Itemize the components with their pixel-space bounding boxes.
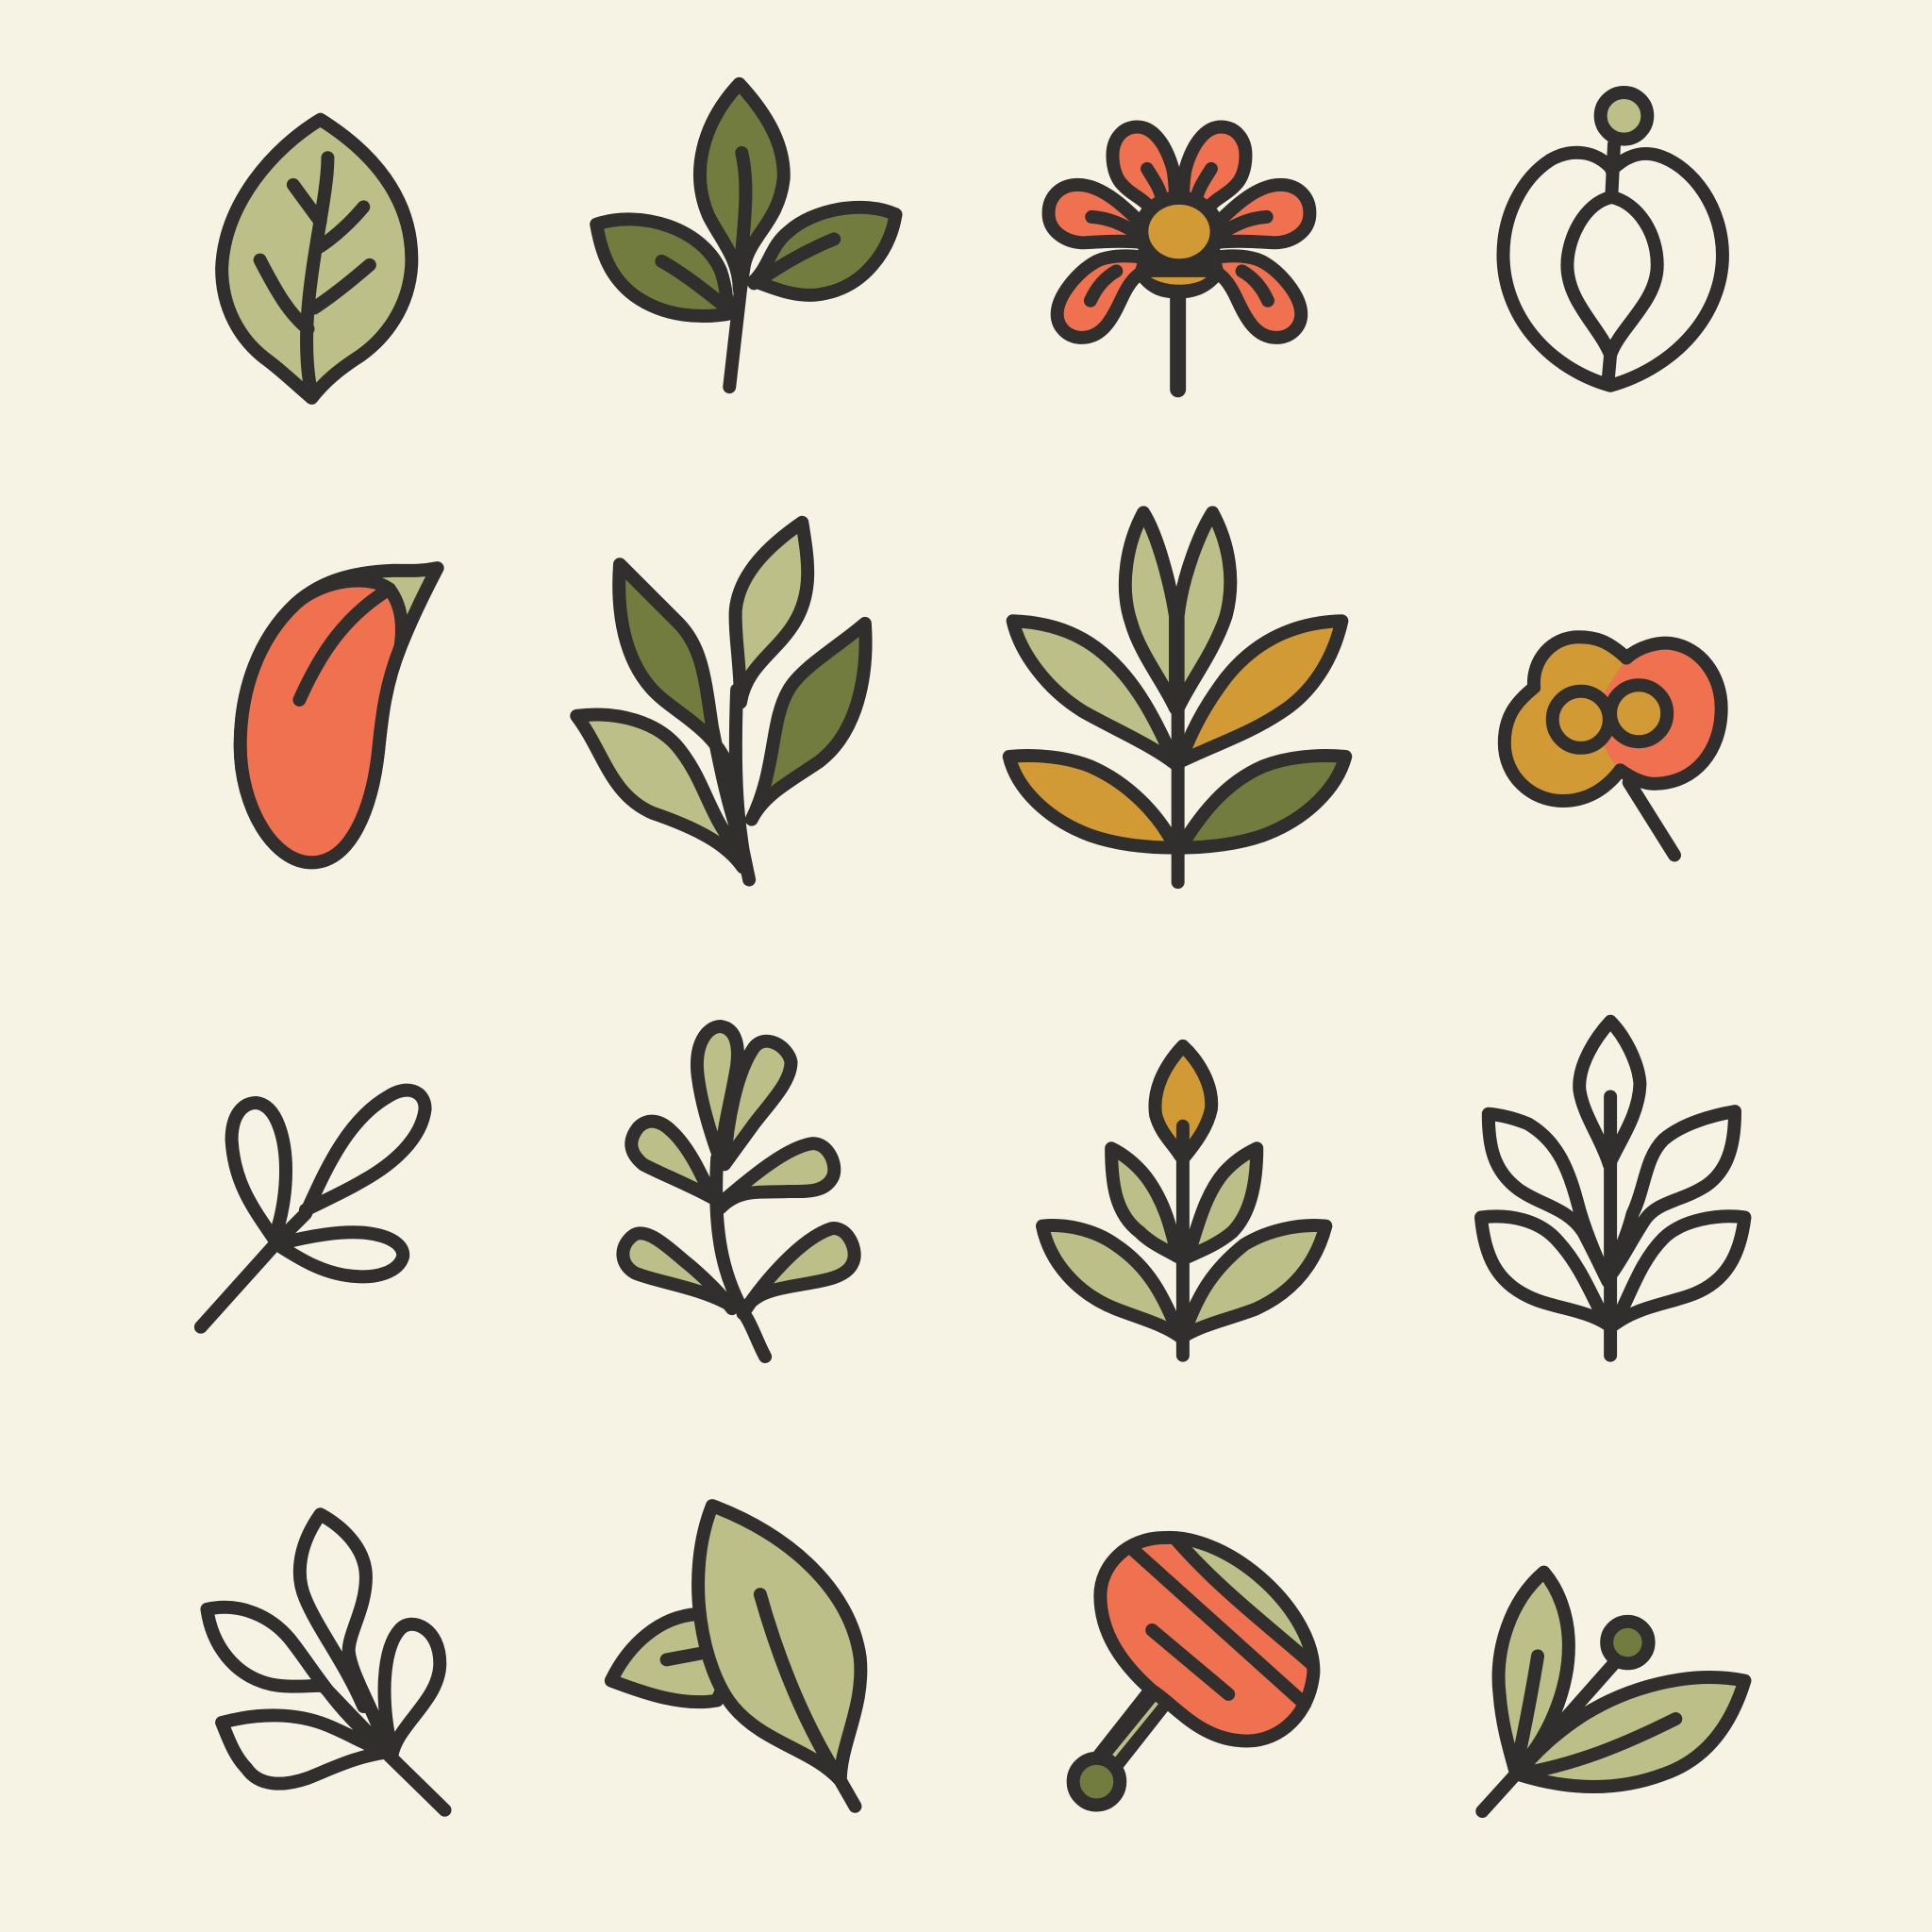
icon: coral seed pod leaf bbox=[241, 568, 438, 862]
icon: olive three-leaf sprig bbox=[596, 84, 896, 387]
icon: mustard and coral double blossom bbox=[1505, 637, 1722, 855]
icon: sage leaves with olive berry bbox=[1482, 1573, 1744, 1811]
icon: six-leaf multicolour branch bbox=[1009, 512, 1345, 882]
icon: sage sprig with mustard bud bbox=[1042, 1046, 1325, 1356]
icon: outline three-leaf sprig bbox=[201, 1091, 425, 1327]
icon: outline four-leaf branch bbox=[207, 1514, 445, 1810]
icon: rounded sage sprig bbox=[623, 1026, 855, 1357]
icon: heart-shaped outline with berry bbox=[1503, 92, 1723, 386]
icon: coral flower bbox=[1049, 127, 1309, 390]
icon: outline five-leaf branch bbox=[1481, 1022, 1744, 1356]
icon: two broad sage leaves bbox=[611, 1506, 860, 1807]
icon: sage leaf with veins bbox=[222, 120, 411, 398]
icon: four-leaf branch sage and olive bbox=[576, 523, 866, 880]
icon: coral paddle leaf with berry bbox=[1074, 1538, 1313, 1805]
